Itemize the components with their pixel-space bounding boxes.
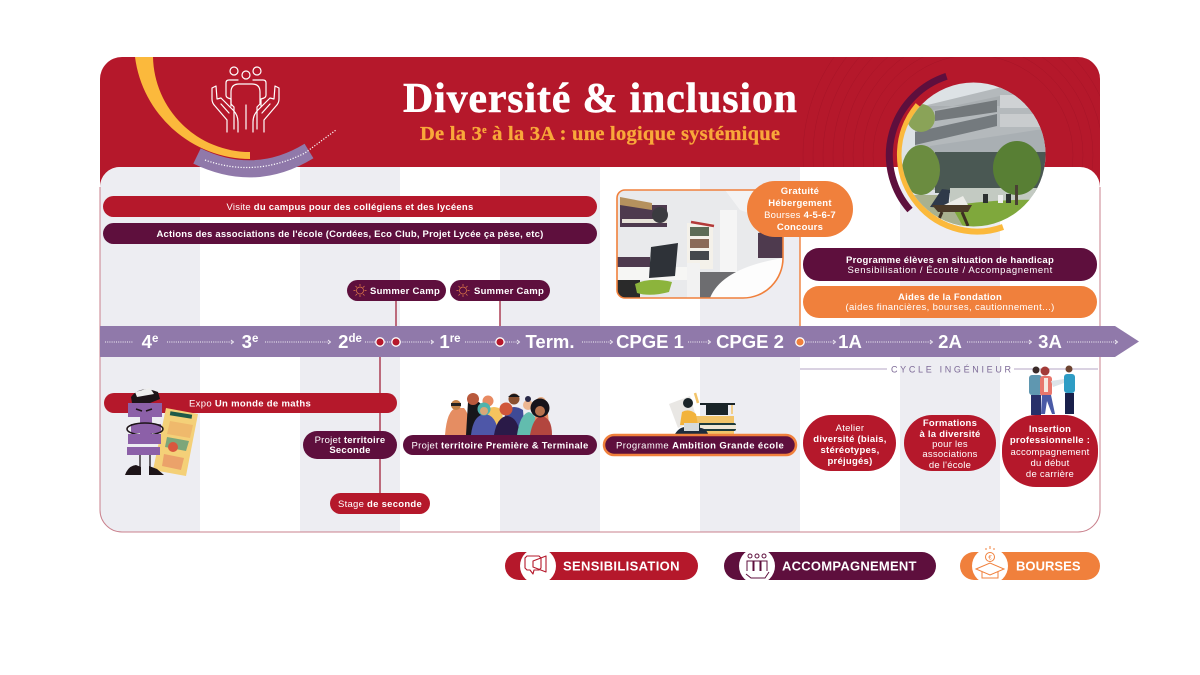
timeline arrow: 3A <box>1038 331 1062 352</box>
pill: stage de seconde: Stage de seconde <box>338 499 422 510</box>
pill: programme handicap: Programme élèves en situation de handicap <box>846 255 1054 266</box>
legend: bourses <box>960 546 1100 584</box>
pill: aides de la fondation: Aides de la Fondation <box>898 292 1002 303</box>
timeline arrow: de <box>348 333 362 345</box>
legend: bourses: BOURSES <box>1016 558 1081 574</box>
illustration: group of people <box>445 393 552 435</box>
legend: sensibilisation <box>505 548 698 584</box>
bubble: gratuité hébergement: Bourses 4-5-6-7 <box>764 210 836 221</box>
bubble: gratuité hébergement: Concours <box>777 222 823 233</box>
illustration: student with books <box>669 393 736 436</box>
bubble: formations à la diversité: pour les <box>932 439 968 450</box>
purple arc with dotted line <box>197 130 336 169</box>
timeline arrow: 1 <box>439 331 450 352</box>
timeline panel <box>100 167 1100 532</box>
legend: bourses: € <box>988 556 992 562</box>
subtitle: De la 3 <box>420 123 482 145</box>
legend: accompagnement: ACCOMPAGNEMENT <box>782 558 917 574</box>
timeline arrow: 3 <box>242 331 252 352</box>
pill: projet territoire première et terminale: Projet territoire Première & Terminale <box>412 440 588 452</box>
timeline arrow: 4 <box>142 331 152 352</box>
timeline arrow: e <box>252 333 258 345</box>
pill: actions des associations <box>103 223 597 244</box>
bubble: insertion professionnelle: professionnelle : <box>1010 435 1090 446</box>
bubble: atelier diversité: préjugés) <box>827 456 873 467</box>
bubble: formations à la diversité: à la diversité <box>919 429 981 440</box>
pill: aides de la fondation <box>803 286 1097 318</box>
pill: programme handicap <box>803 248 1097 281</box>
cycle ingénieur label: CYCLE INGÉNIEUR <box>891 364 1012 374</box>
bubble: formations à la diversité: associations <box>922 449 978 460</box>
pill: aides de la fondation: (aides financières, bourses, cautionnement...) <box>846 302 1054 313</box>
timeline arrow: CPGE 1 <box>616 331 684 352</box>
illustration: three colleagues <box>1029 366 1075 415</box>
pill: visite du campus: Visite du campus pour des collégiens et des lycéens <box>226 202 474 213</box>
timeline arrow: Term. <box>525 331 575 352</box>
timeline markers <box>376 338 804 346</box>
bubble: insertion professionnelle: du début <box>1031 458 1070 469</box>
bubble: atelier diversité: diversité (biais, <box>813 434 887 445</box>
timeline arrow <box>100 326 1139 357</box>
timeline arrow: 2A <box>938 331 962 352</box>
subtitle: à la 3A : une logique systémique <box>487 123 780 145</box>
illustration: math character and poster <box>125 388 198 476</box>
bubble: atelier diversité <box>803 415 896 471</box>
bubble: atelier diversité: stéréotypes, <box>821 445 879 456</box>
bubble: gratuité hébergement: Gratuité <box>781 186 819 197</box>
timeline arrow: re <box>450 333 461 345</box>
bubble: gratuité hébergement <box>747 181 853 237</box>
legend: accompagnement <box>724 548 936 584</box>
pill: summer camp 1 <box>347 280 446 301</box>
pill: visite du campus <box>103 196 597 217</box>
timeline arrow: CPGE 2 <box>716 331 784 352</box>
bubble: insertion professionnelle: Insertion <box>1029 424 1071 435</box>
room photo <box>617 190 783 298</box>
pill: stage de seconde <box>330 493 430 514</box>
pill: summer camp 2: Summer Camp <box>474 286 544 297</box>
title: Diversité & inclusion <box>403 76 797 122</box>
pill: projet territoire seconde: Projet territoire <box>315 435 385 446</box>
campus photo <box>889 76 1050 232</box>
connector: summer camp and seconde lines <box>380 301 500 493</box>
bubble: formations à la diversité: de l'école <box>929 460 971 471</box>
pill: actions des associations: Actions des associations de l'école (Cordées, Eco Club, Projet Lycée ça pèse, etc) <box>156 229 544 240</box>
pill: programme ambition grande école: Programme Ambition Grande école <box>616 440 784 452</box>
subtitle: e <box>482 125 487 136</box>
timeline arrow: 1A <box>838 331 862 352</box>
dotted arrows <box>105 340 1118 344</box>
decorative yellow arc <box>135 57 250 159</box>
pill: programme ambition grande école <box>604 435 796 455</box>
pill: expo un monde de maths: Expo Un monde de maths <box>189 398 311 410</box>
pill: expo un monde de maths <box>104 393 397 413</box>
pill: projet territoire seconde <box>303 431 397 459</box>
bubble: atelier diversité: Atelier <box>836 423 864 434</box>
header band <box>100 57 1100 187</box>
pill: summer camp 1: Summer Camp <box>370 286 440 297</box>
pill: projet territoire seconde: Seconde <box>329 445 371 456</box>
bubble: insertion professionnelle <box>1002 415 1098 487</box>
connector: orange housing line <box>799 237 801 342</box>
timeline arrow: 2 <box>338 331 348 352</box>
bubble: gratuité hébergement: Hébergement <box>768 198 832 209</box>
bubble: formations à la diversité <box>904 415 996 471</box>
bubble: insertion professionnelle: accompagnement <box>1010 447 1090 458</box>
legend: sensibilisation: SENSIBILISATION <box>563 558 680 574</box>
pill: summer camp 2 <box>450 280 550 301</box>
icon: people held in hands <box>212 67 279 132</box>
bubble: insertion professionnelle: de carrière <box>1026 469 1074 480</box>
timeline arrow: e <box>152 333 158 345</box>
bubble: formations à la diversité: Formations <box>923 418 977 429</box>
pill: programme handicap: Sensibilisation / Écoute / Accompagnement <box>848 265 1053 276</box>
pill: projet territoire première et terminale <box>403 435 597 455</box>
